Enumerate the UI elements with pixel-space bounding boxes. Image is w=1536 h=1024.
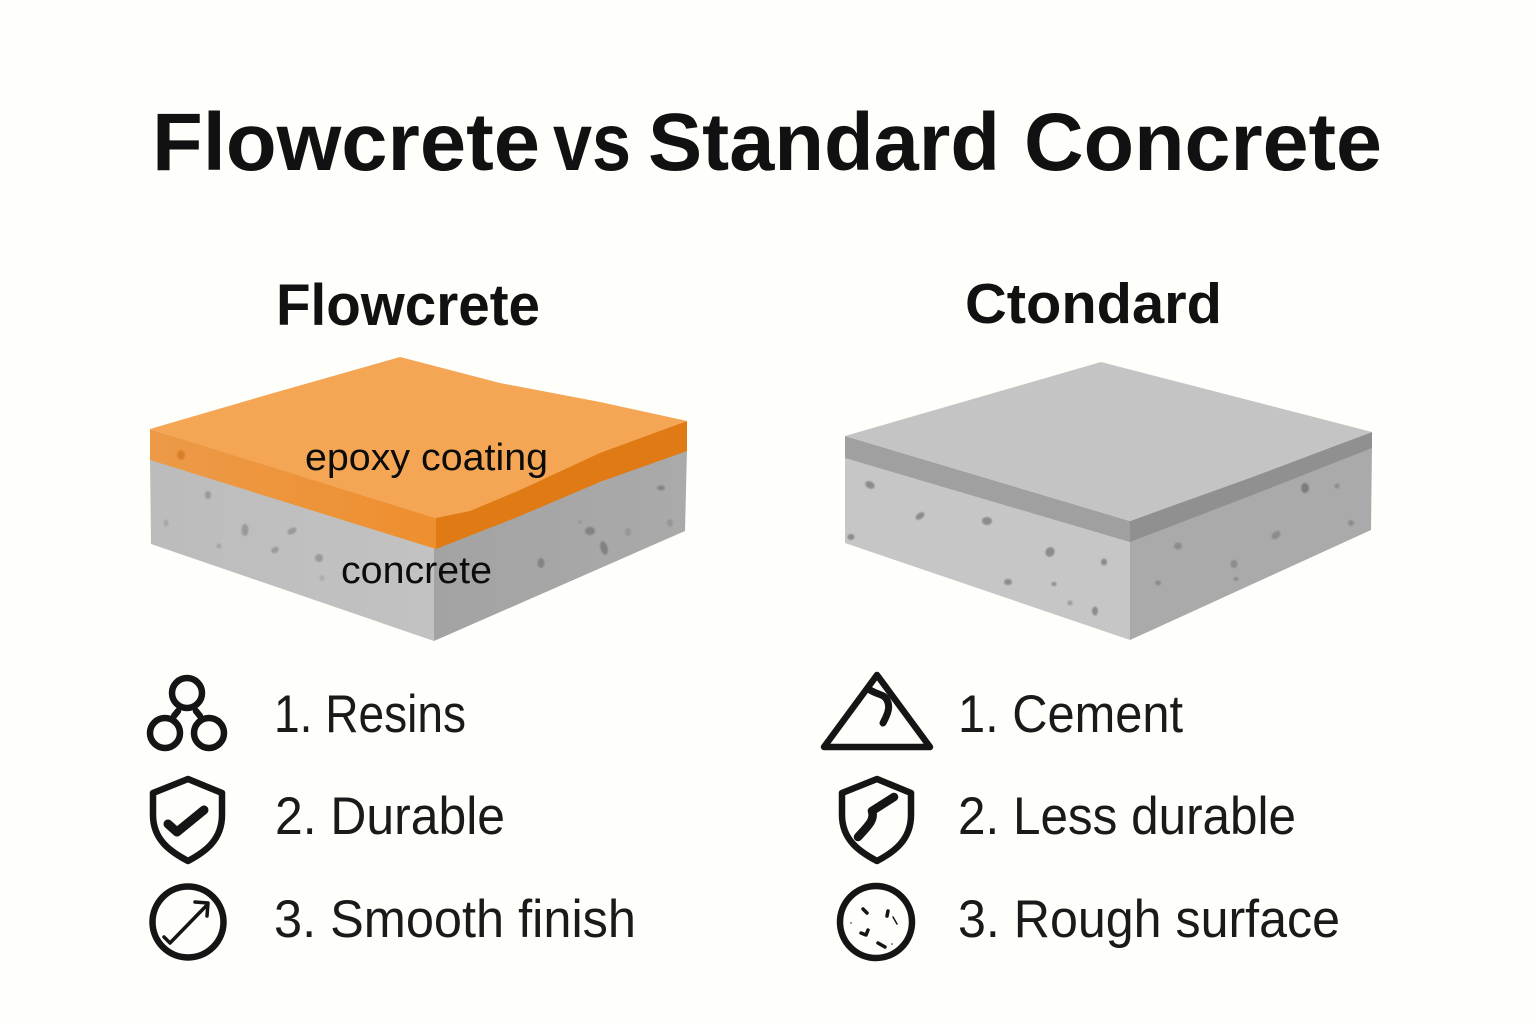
text: Cement: 1. Cement [958, 685, 1183, 744]
right stripe [1130, 432, 1372, 542]
concrete left face [845, 456, 1130, 640]
list: Flowcrete properties [150, 678, 636, 958]
concrete left face [150, 458, 436, 641]
label: concrete: concrete [341, 550, 492, 592]
list: Standard properties [824, 675, 1340, 958]
title [152, 97, 1382, 188]
title: vs [553, 97, 631, 188]
text: Smooth finish: 3. Smooth finish [274, 890, 636, 949]
epoxy top surface [150, 357, 687, 518]
text: Rough surface: 3. Rough surface [958, 890, 1340, 949]
heading: Flowcrete: Flowcrete [276, 273, 540, 338]
top surface [845, 362, 1372, 521]
epoxy right band [436, 421, 687, 549]
label: epoxy coating: epoxy coating [305, 437, 548, 479]
icon: shield with check [153, 779, 222, 861]
panel: Standard [824, 272, 1372, 958]
concrete right face [1130, 446, 1372, 640]
heading: Ctondard: Ctondard [965, 272, 1222, 336]
icon: cement mountain [824, 675, 930, 747]
title: Flowcrete [152, 97, 540, 188]
title: Standard [648, 97, 1000, 188]
epoxy left band [150, 429, 436, 549]
concrete right face [434, 449, 687, 641]
text: Resins: 1. Resins [274, 685, 466, 744]
icon: rough circle [840, 886, 912, 958]
text: Durable: 2. Durable [275, 787, 505, 846]
text: Less durable: 2. Less durable [958, 787, 1296, 846]
title: Concrete [1024, 97, 1382, 188]
aggregate specks [164, 486, 673, 581]
icon: resins [150, 678, 224, 748]
icon: cracked shield [842, 779, 911, 861]
left stripe [845, 436, 1130, 542]
aggregate specks [848, 480, 1354, 616]
diagram: Flowcrete slab [150, 357, 687, 641]
panel: Flowcrete [150, 273, 687, 958]
diagram: standard concrete slab [845, 362, 1372, 640]
icon: smooth arrow circle [152, 886, 224, 958]
